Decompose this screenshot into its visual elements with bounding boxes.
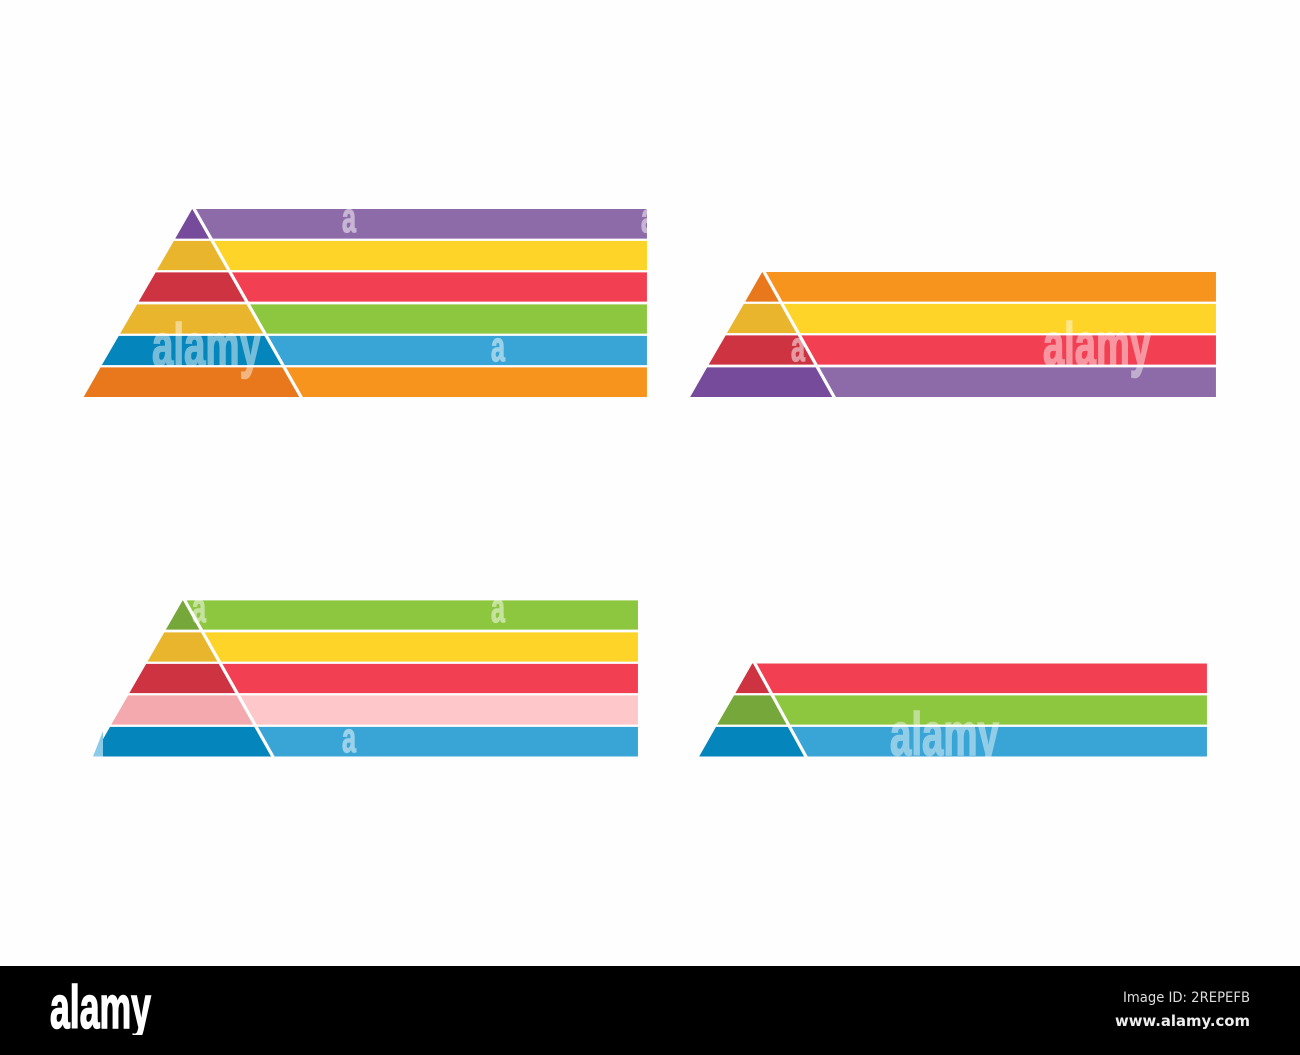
panel: five-tier pyramid chart bbox=[92, 598, 638, 758]
pyramid slant line bbox=[193, 207, 302, 399]
tier 5: blue bbox=[92, 726, 638, 757]
watermark word: chart 4: alamy bbox=[890, 701, 999, 768]
panel: six-tier pyramid chart bbox=[83, 207, 647, 399]
panel: three-tier pyramid chart bbox=[698, 662, 1207, 758]
tier 1: purple bbox=[175, 209, 647, 239]
watermark letter: chart 2 red tier: a bbox=[791, 323, 805, 370]
tier 1: red bbox=[735, 663, 1207, 694]
watermark letter: chart 3 green bar: a bbox=[491, 584, 505, 631]
tier 4: purple bbox=[690, 367, 1216, 397]
tier 1: green bbox=[165, 600, 638, 630]
footer band bbox=[0, 966, 1300, 1055]
footer logo: alamy bbox=[50, 974, 151, 1041]
tier 2: yellow bbox=[726, 304, 1216, 334]
watermark letter: chart 3 blue bar: a bbox=[342, 714, 356, 761]
website: www.alamy.com bbox=[1115, 1012, 1250, 1030]
watermark letter: chart 1 blue bar: a bbox=[491, 323, 505, 370]
watermark letter: chart 1 top right: a bbox=[641, 194, 655, 241]
pyramid slant line bbox=[763, 270, 835, 399]
watermark word: chart 1: alamy bbox=[152, 312, 261, 379]
watermark letter: chart 3 apex: a bbox=[192, 584, 206, 631]
tier 6: orange bbox=[83, 367, 647, 397]
tier 3: blue bbox=[698, 726, 1207, 757]
tier 5: blue bbox=[101, 336, 647, 366]
tier 2: yellow bbox=[156, 240, 647, 270]
pyramid slant line bbox=[183, 598, 274, 758]
tier 2: green bbox=[717, 695, 1207, 725]
tier 4: pink bbox=[111, 695, 638, 725]
watermarks bbox=[93, 194, 1151, 768]
tier 1: orange bbox=[745, 272, 1216, 302]
image id: Image ID: 2REPEFB bbox=[1123, 990, 1250, 1006]
watermark word: chart 2: alamy bbox=[1043, 311, 1151, 378]
tier 4: green bbox=[120, 304, 647, 334]
watermark letter: chart 1 top: a bbox=[342, 194, 356, 241]
watermark fragment: chart 3 base corner bbox=[93, 731, 103, 756]
panel: four-tier pyramid chart bbox=[690, 270, 1216, 399]
pyramid slant line bbox=[754, 662, 807, 758]
tier 3: red bbox=[708, 335, 1216, 365]
tier 2: yellow bbox=[147, 632, 638, 662]
tier 3: red bbox=[138, 272, 647, 302]
tier 3: red bbox=[129, 664, 638, 694]
